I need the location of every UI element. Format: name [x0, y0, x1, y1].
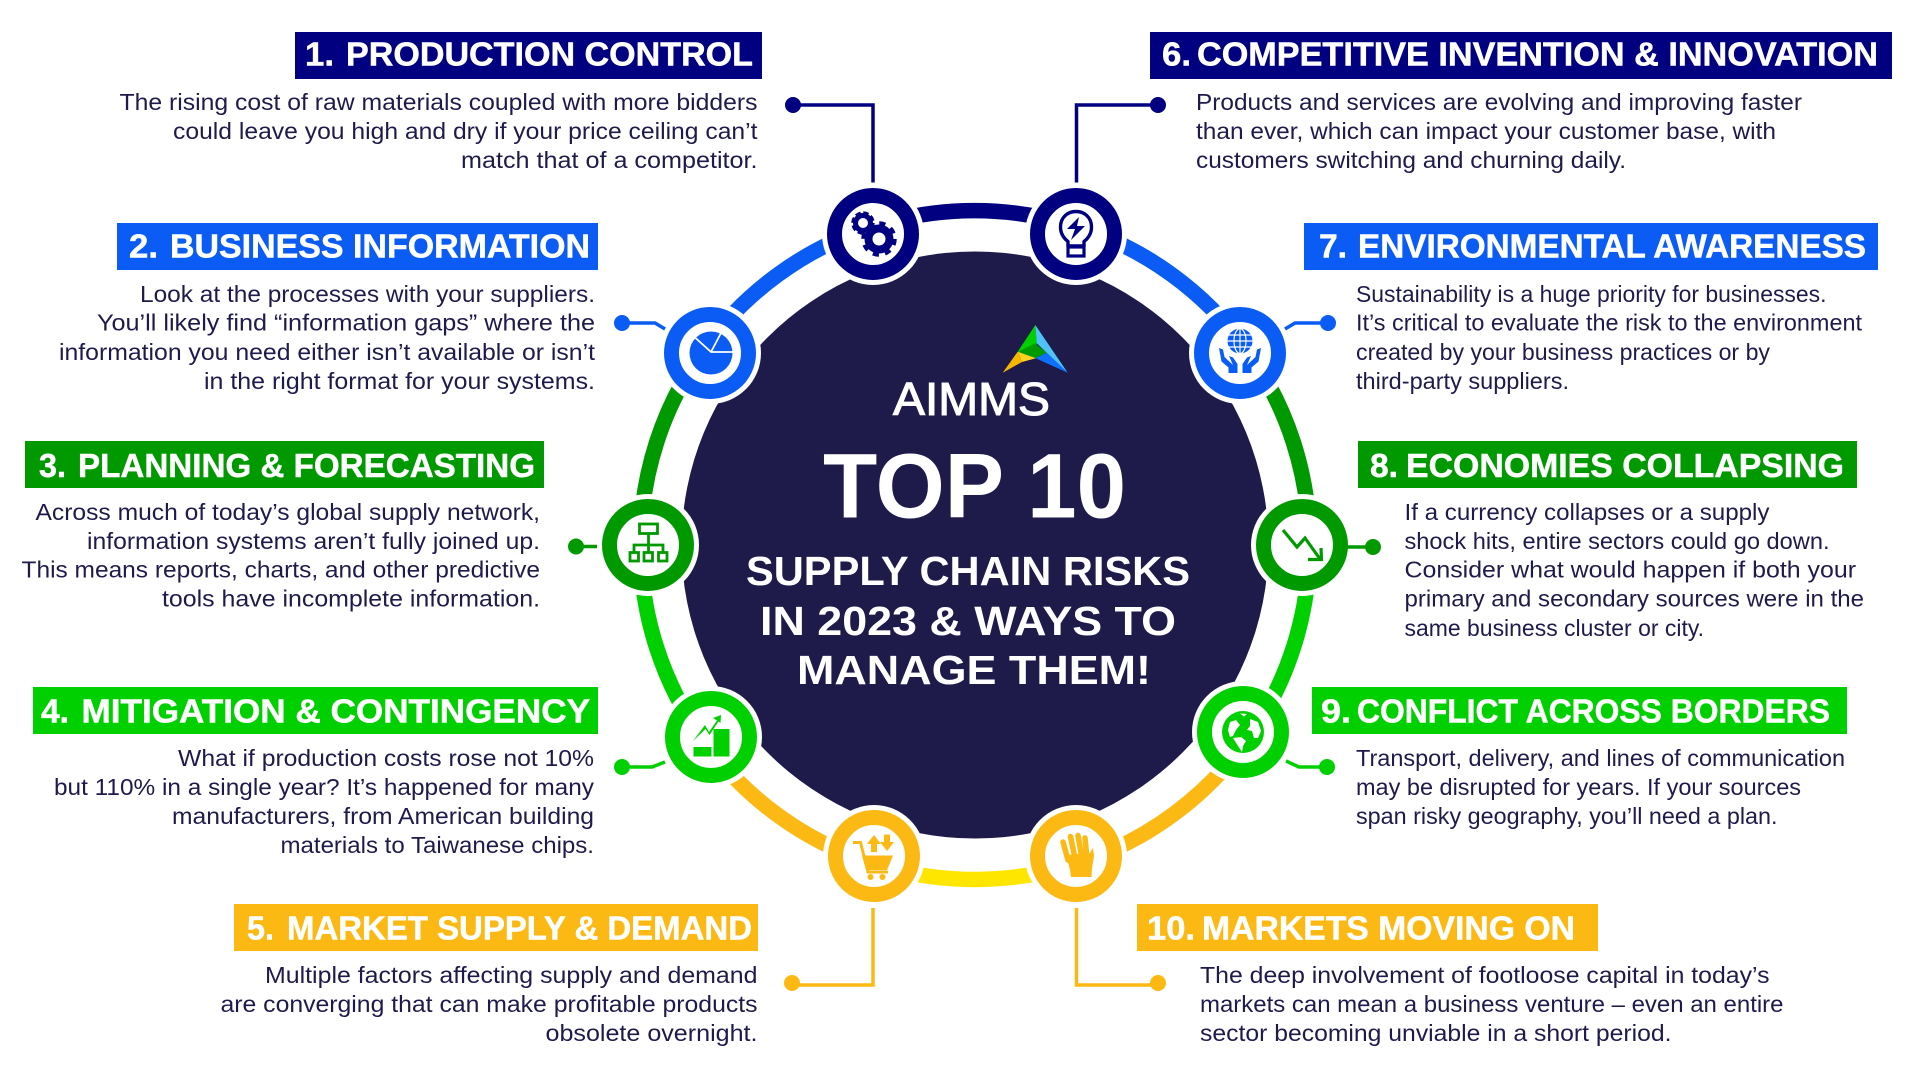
text: market supply and demand: are converging that can make profitable products — [220, 991, 758, 1017]
brand name: AIMMS — [893, 373, 1050, 425]
logo: AIMMS mark — [1003, 325, 1068, 373]
heading: markets moving on: 10. — [1147, 910, 1195, 946]
text: markets moving on: sector becoming unviable in a short period. — [1200, 1020, 1672, 1046]
connector: planning and forecasting — [568, 538, 597, 554]
heading: mitigation and contingency: MITIGATION & CONTINGENCY — [82, 692, 590, 730]
text: environmental awareness: created by your business practices or by — [1356, 339, 1770, 365]
text: planning and forecasting: Across much of today’s global supply network, — [36, 499, 540, 525]
text: conflict across borders: Transport, delivery, and lines of communication — [1356, 745, 1845, 771]
heading: market supply and demand: 5. — [247, 910, 274, 946]
icon: falling trend badge — [1251, 494, 1353, 596]
heading: economies collapsing: ECONOMIES COLLAPSING — [1406, 447, 1844, 484]
text: economies collapsing: Consider what would happen if both your — [1404, 556, 1856, 582]
connector: mitigation and contingency — [614, 759, 665, 775]
text: markets moving on: The deep involvement of footloose capital in today’s — [1200, 962, 1770, 988]
text: planning and forecasting: This means reports, charts, and other predictive — [22, 556, 540, 582]
subtitle: MANAGE THEM! — [797, 647, 1151, 693]
heading: conflict across borders: 9. — [1321, 692, 1351, 730]
text: mitigation and contingency — [54, 745, 594, 858]
text: economies collapsing: primary and secondary sources were in the — [1404, 586, 1864, 612]
icon: raised hand badge — [1025, 805, 1127, 907]
text: markets moving on — [1200, 962, 1784, 1046]
heading: production control — [295, 32, 762, 79]
text: business information: in the right format for your systems. — [204, 368, 595, 394]
panel: 2 business information — [59, 223, 665, 394]
text: planning and forecasting — [22, 499, 540, 612]
text: economies collapsing: If a currency collapses or a supply — [1404, 499, 1770, 525]
panel: 7 environmental awareness — [1285, 223, 1878, 394]
text: markets moving on: markets can mean a business venture – even an entire — [1200, 991, 1784, 1017]
text: environmental awareness — [1356, 281, 1862, 394]
text: market supply and demand — [220, 962, 758, 1046]
icon: gears badge — [822, 183, 924, 285]
icon: organisation chart badge — [597, 494, 699, 596]
heading: competitive invention and innovation: COMPETITIVE INVENTION & INNOVATION — [1197, 36, 1878, 72]
text: economies collapsing: same business cluster or city. — [1404, 615, 1704, 641]
heading: markets moving on — [1137, 904, 1598, 951]
connector: competitive invention and innovation — [1076, 97, 1166, 182]
heading: environmental awareness: 7. — [1319, 228, 1347, 264]
text: production control — [120, 89, 758, 173]
text: business information: You’ll likely find “information gaps” where the — [97, 310, 595, 336]
text: mitigation and contingency: manufacturers, from American building — [172, 803, 594, 829]
text: planning and forecasting: information systems aren’t fully joined up. — [87, 528, 540, 554]
heading: planning and forecasting — [25, 441, 544, 488]
heading: market supply and demand — [234, 904, 758, 951]
icon: lightbulb badge — [1025, 183, 1127, 285]
text: environmental awareness: Sustainability is a huge priority for businesses. — [1356, 281, 1826, 307]
heading: economies collapsing: 8. — [1370, 447, 1398, 484]
panel: 1 production control — [120, 32, 873, 182]
panel: 4 mitigation and contingency — [33, 687, 665, 858]
subtitle — [746, 548, 1190, 693]
icon: rising chart badge — [660, 686, 762, 788]
heading: business information: BUSINESS INFORMATION — [170, 228, 590, 264]
heading: business information — [117, 223, 598, 270]
text: competitive invention and innovation — [1196, 89, 1802, 173]
heading: environmental awareness — [1304, 223, 1878, 270]
connector: business information — [614, 315, 665, 331]
text: conflict across borders: may be disrupted for years. If your sources — [1356, 774, 1801, 800]
panel: 6 competitive invention and innovation — [1076, 32, 1892, 182]
text: competitive invention and innovation: than ever, which can impact your customer base, with — [1196, 118, 1776, 144]
text: competitive invention and innovation: Products and services are evolving and improving faster — [1196, 89, 1802, 115]
icon: shopping cart badge — [823, 805, 925, 907]
subtitle: SUPPLY CHAIN RISKS — [746, 548, 1190, 594]
text: mitigation and contingency: What if production costs rose not 10% — [178, 745, 594, 771]
heading: planning and forecasting: PLANNING & FORECASTING — [78, 447, 535, 484]
heading: mitigation and contingency: 4. — [41, 692, 69, 730]
text: market supply and demand: obsolete overnight. — [546, 1020, 758, 1046]
heading: conflict across borders: CONFLICT ACROSS BORDERS — [1357, 692, 1830, 730]
text: environmental awareness: It’s critical to evaluate the risk to the environment — [1356, 310, 1862, 336]
text: business information — [59, 281, 595, 394]
connector: conflict across borders — [1286, 759, 1335, 775]
icon: earth badge — [1192, 681, 1294, 783]
connector: markets moving on — [1076, 908, 1166, 991]
subtitle: IN 2023 & WAYS TO — [760, 598, 1176, 644]
heading: mitigation and contingency — [33, 687, 598, 734]
text: production control: match that of a competitor. — [461, 147, 758, 173]
panel: 5 market supply and demand — [220, 904, 873, 1046]
connector: production control — [785, 97, 873, 182]
text: environmental awareness: third-party suppliers. — [1356, 368, 1569, 394]
connector: market supply and demand — [784, 908, 873, 991]
connector: environmental awareness — [1285, 315, 1336, 331]
title: top 10: TOP 10 — [823, 436, 1126, 538]
heading: competitive invention and innovation: 6. — [1162, 36, 1191, 72]
text: mitigation and contingency: materials to Taiwanese chips. — [280, 832, 594, 858]
icon: globe in hands badge — [1189, 302, 1291, 404]
icon: pie chart badge — [659, 302, 761, 404]
heading: market supply and demand: MARKET SUPPLY & DEMAND — [287, 910, 752, 946]
ring of coloured arcs — [640, 211, 1310, 879]
text: economies collapsing — [1404, 499, 1864, 641]
text: planning and forecasting: tools have incomplete information. — [162, 586, 540, 612]
text: economies collapsing: shock hits, entire sectors could go down. — [1404, 528, 1830, 554]
panel: 10 markets moving on — [1076, 904, 1784, 1046]
panel: 3 planning and forecasting — [22, 441, 597, 612]
heading: production control: PRODUCTION CONTROL — [346, 36, 753, 72]
panel: 8 economies collapsing — [1347, 441, 1864, 641]
heading: environmental awareness: ENVIRONMENTAL AWARENESS — [1358, 228, 1866, 264]
text: conflict across borders — [1356, 745, 1845, 829]
heading: planning and forecasting: 3. — [39, 447, 66, 484]
heading: markets moving on: MARKETS MOVING ON — [1202, 910, 1575, 946]
text: production control: could leave you high and dry if your price ceiling can’t — [173, 118, 758, 144]
text: production control: The rising cost of raw materials coupled with more bidders — [120, 89, 758, 115]
text: conflict across borders: span risky geography, you’ll need a plan. — [1356, 803, 1778, 829]
text: mitigation and contingency: but 110% in a single year? It’s happened for many — [54, 774, 594, 800]
central disc — [682, 252, 1268, 838]
panel: 9 conflict across borders — [1286, 687, 1847, 829]
heading: business information: 2. — [129, 228, 158, 264]
text: market supply and demand: Multiple factors affecting supply and demand — [265, 962, 758, 988]
heading: economies collapsing — [1358, 441, 1857, 488]
heading: production control: 1. — [305, 36, 334, 72]
text: business information: Look at the processes with your suppliers. — [140, 281, 595, 307]
text: competitive invention and innovation: customers switching and churning daily. — [1196, 147, 1626, 173]
heading: competitive invention and innovation — [1150, 32, 1892, 79]
connector: economies collapsing — [1347, 539, 1381, 555]
text: business information: information you need either isn’t available or isn’t — [59, 339, 595, 365]
